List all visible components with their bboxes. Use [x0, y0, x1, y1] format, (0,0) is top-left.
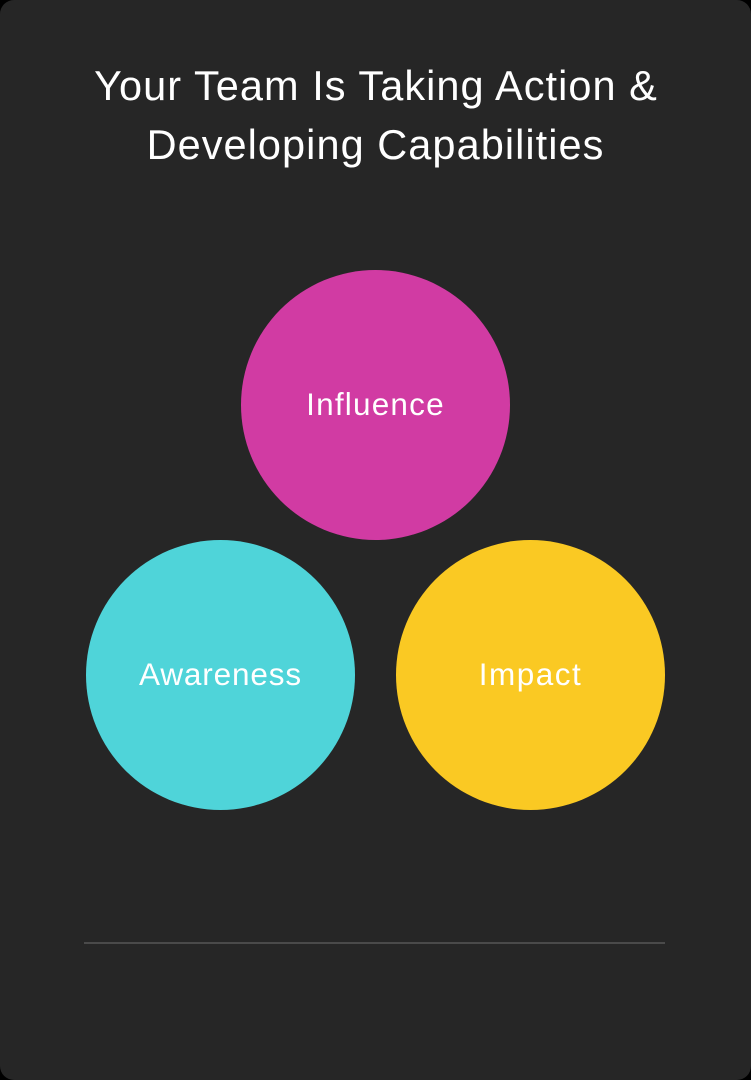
circle: Impact: Impact: [479, 656, 582, 692]
circle: Awareness: [86, 540, 355, 810]
circle: Influence: Influence: [306, 386, 445, 422]
title: Your Team Is Taking Action &: [94, 62, 658, 109]
divider line: [84, 942, 665, 944]
circle: Influence: [241, 270, 510, 540]
title: Developing Capabilities: [147, 121, 604, 168]
circle: Awareness: Awareness: [139, 656, 302, 692]
title: [94, 62, 658, 168]
circle: Impact: [396, 540, 665, 810]
